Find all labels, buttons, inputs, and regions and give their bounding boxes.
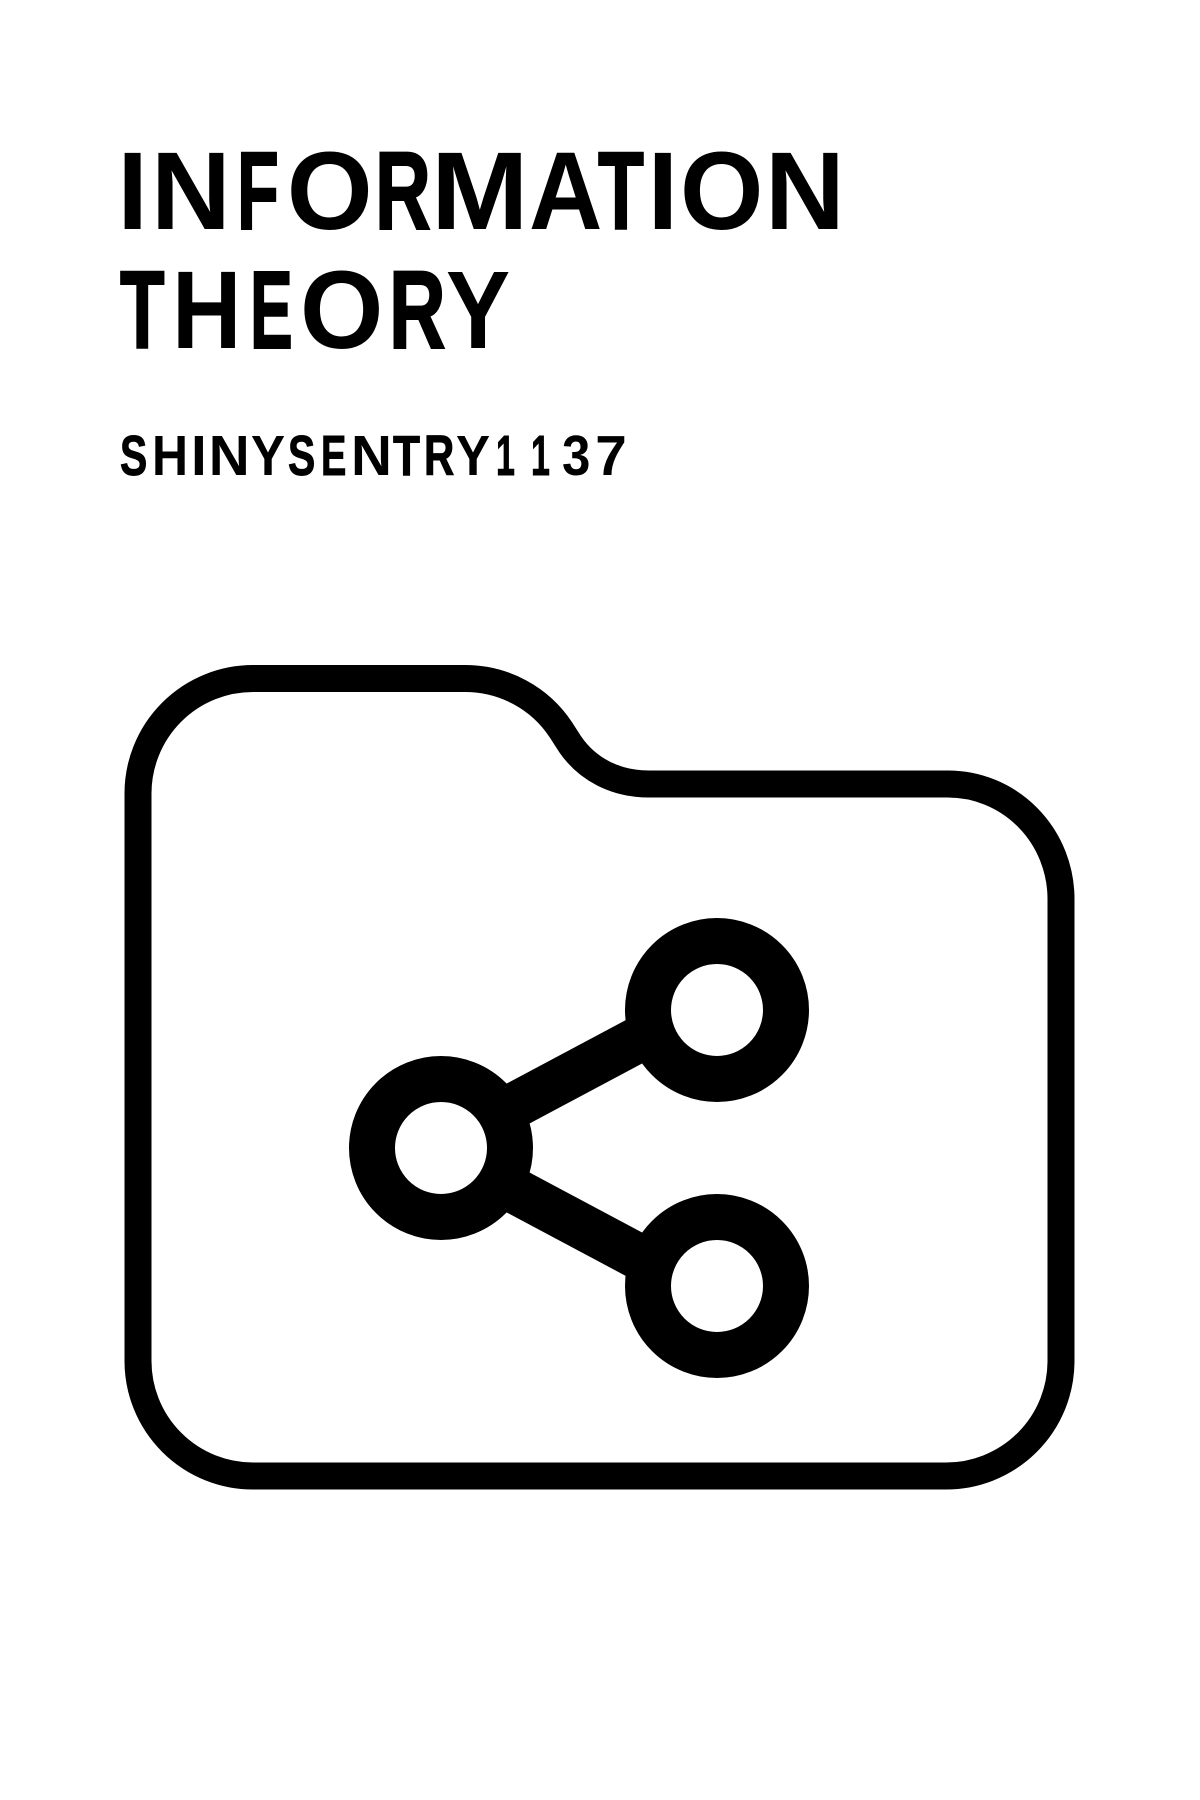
title line 1: I (648, 130, 678, 253)
title line 1: I (117, 130, 148, 253)
title line 1: R (375, 130, 431, 253)
author name: E (321, 425, 346, 488)
title line 1: N (151, 130, 231, 253)
author name: 1 (531, 425, 550, 488)
title line 1: O (287, 130, 373, 253)
title line 2: Y (446, 248, 510, 372)
title line 2: T (120, 248, 165, 372)
author name: I (191, 425, 207, 488)
lower connector (499, 1182, 651, 1263)
author name: Y (250, 425, 285, 488)
upper node (648, 941, 786, 1079)
title line 1: O (680, 130, 763, 253)
title (117, 130, 845, 372)
title line 2 (120, 248, 510, 372)
title line 2: O (300, 248, 383, 372)
author name: 1 (496, 425, 515, 488)
author name: Y (456, 425, 490, 488)
author name: S (288, 425, 316, 488)
author name: N (209, 425, 250, 488)
author name (120, 425, 627, 488)
title line 1: M (430, 130, 528, 253)
share symbol (372, 941, 786, 1355)
title line 2: E (250, 248, 292, 372)
upper connector (499, 1033, 651, 1114)
author name: T (393, 425, 420, 488)
lower node (648, 1217, 786, 1355)
title line 1: A (529, 130, 602, 253)
author name: 3 (562, 425, 590, 488)
author name: R (424, 425, 454, 488)
left node (372, 1079, 510, 1217)
title line 1: N (765, 130, 845, 253)
author name: H (152, 425, 188, 488)
folder outline (138, 678, 1061, 1476)
author name: N (351, 425, 392, 488)
author name: S (120, 425, 147, 488)
title line 1: F (237, 130, 279, 253)
title line 2: R (389, 248, 446, 372)
author name: 7 (595, 425, 627, 488)
title line 1: T (598, 130, 644, 253)
title line 2: H (172, 248, 242, 372)
title line 1 (117, 130, 845, 253)
